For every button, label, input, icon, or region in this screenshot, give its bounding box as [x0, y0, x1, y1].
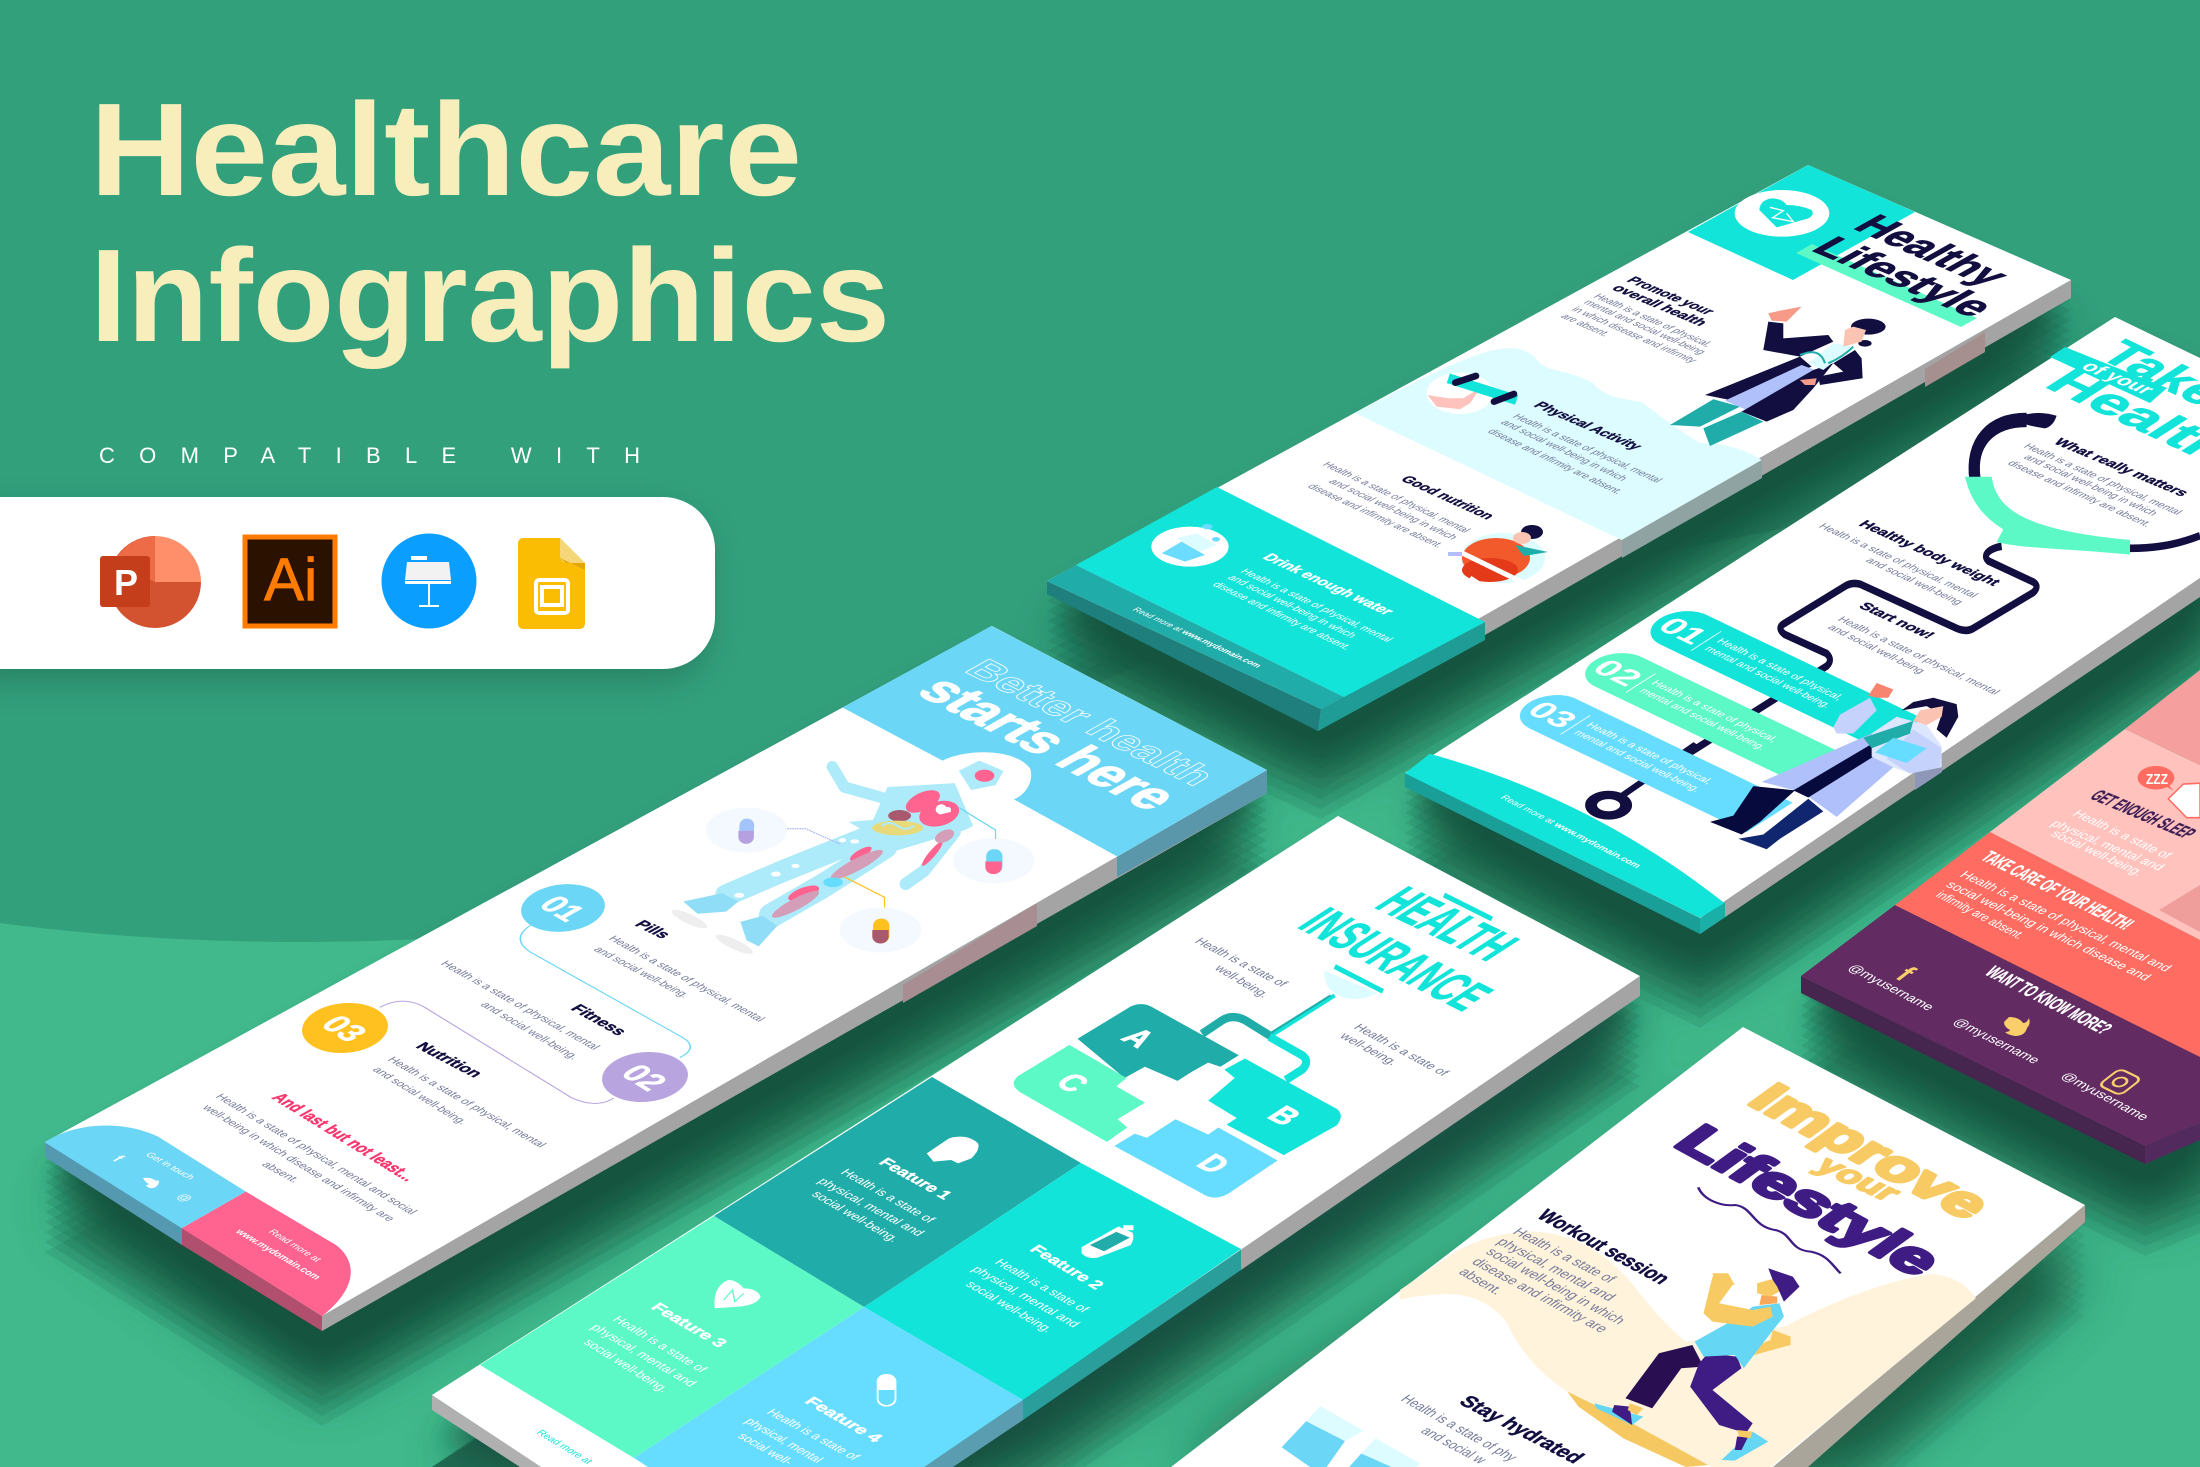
panel: Healthy Lifestyle card: [1047, 165, 2071, 731]
badge 01: [504, 874, 622, 942]
title: Improve your Lifestyle: Lifestyle: [1662, 1116, 1956, 1285]
panel: Health Insurance card: [432, 816, 1640, 1467]
panel: Take care of your health purple card: [1801, 670, 2200, 1164]
pill 03: 03: [1519, 696, 1585, 733]
badge 03: 03: [313, 1010, 375, 1047]
pill 01: 01: [1650, 613, 1716, 649]
text: good nutrition: Good nutrition: [1397, 474, 1498, 521]
text: physical activity: and social well-being in which: [1497, 419, 1630, 483]
title: Better health starts here: starts here: [904, 669, 1193, 818]
text: fitness: [437, 959, 630, 1061]
footer: [1405, 754, 1724, 918]
text: and last but not least: absent.: [258, 1160, 302, 1185]
text: drink enough water: [1209, 552, 1398, 652]
text: feature 3: [580, 1301, 731, 1395]
title: Improve your Lifestyle: Improve: [1737, 1075, 2005, 1227]
text: physical activity: Physical Activity: [1530, 400, 1647, 452]
text: and last but not least: well-being in which disease and infirmity are: [198, 1103, 397, 1223]
social: twitter: @myusername: [1949, 1015, 2044, 1066]
panel: software icons: [0, 497, 715, 682]
footer: Read more at: [265, 1228, 324, 1264]
text: feature 4: [734, 1395, 887, 1467]
illustration: stethoscope: [1687, 413, 2200, 755]
text: physical activity: Health is a state of physical, mental: [1509, 413, 1664, 484]
stethoscope ring: [1591, 744, 1696, 815]
feature cells: [480, 1077, 1241, 1467]
footer: f: [108, 1154, 127, 1164]
pill 01: Health is a state of physical,: [1714, 637, 1846, 702]
text: feature 1: social well-being.: [808, 1189, 903, 1244]
text: fitness: Fitness: [566, 1002, 630, 1038]
text: take care of your health: Health is a state of physical, mental and: [1956, 869, 2175, 974]
text: workout session: disease and infirmity are: [1468, 1255, 1613, 1335]
text: promote your overall health: mental and social well-being: [1580, 299, 1708, 356]
text: feature 2: Feature 2: [1025, 1243, 1107, 1292]
title: Health Insurance: INSURANCE: [1285, 900, 1505, 1019]
connector lines: [380, 925, 690, 1103]
icon: Illustrator: [245, 537, 335, 626]
text: drink enough water: disease and infirmity are absent.: [1209, 581, 1353, 652]
card side: [1047, 280, 2071, 731]
text: good nutrition: Health is a state of physical, mental: [1319, 461, 1472, 535]
icon: heart: [714, 1280, 761, 1308]
icon: PowerPoint: [100, 536, 201, 628]
social: facebook: f: [1889, 962, 1923, 986]
text: healthy body weight: [1815, 518, 2005, 607]
title: Take care of your Health: of your: [2076, 358, 2160, 398]
text: workout session: Health is a state of: [1509, 1225, 1620, 1285]
text: start now: and social well-being: [1824, 623, 1928, 676]
badge 02: 02: [613, 1059, 675, 1096]
illustration: human body with pills: [670, 761, 1034, 957]
title: Improve your Lifestyle: [1662, 1075, 2005, 1285]
puzzle letters: B: [1260, 1101, 1309, 1131]
pill 02: [1572, 646, 1858, 790]
badge 01: 01: [531, 891, 593, 926]
panel: Improve your Lifestyle card: [1171, 1027, 2085, 1467]
card face: [1047, 165, 2071, 709]
text: stay hydrated: and social w: [1417, 1424, 1492, 1466]
text: and last but not least: Health is a state of physical, mental and social: [212, 1092, 419, 1216]
title: Take care of your Health: [2033, 334, 2200, 471]
puzzle letters: D: [1189, 1149, 1238, 1179]
text: feature 3: physical, mental and: [587, 1322, 700, 1389]
text: feature 2: Health is a state of: [991, 1257, 1093, 1315]
icon: heart: [1735, 190, 1829, 237]
text: stay hydrated: Stay hydrated: [1454, 1392, 1589, 1467]
pill 03: mental and social well-being.: [1571, 728, 1704, 794]
title: Improve your Lifestyle: your: [1807, 1152, 1909, 1207]
text: good nutrition: [1304, 461, 1498, 550]
card face: [432, 816, 1640, 1467]
panel: Better health card: [45, 626, 1267, 1331]
pill 02: Health is a state of physical,: [1648, 679, 1781, 744]
card side: [432, 976, 1640, 1467]
text: nutrition: Health is a state of physical, mental: [384, 1055, 549, 1149]
icon: battery: [1082, 1225, 1133, 1258]
text: promote your overall health: are absent.: [1557, 313, 1612, 338]
header block: [842, 626, 1267, 857]
panel: Take care of your Health card: [1405, 317, 2200, 934]
footer: www.mydomain.com: [231, 1227, 323, 1282]
card side: [1405, 578, 2200, 934]
purple footer: [1801, 905, 2200, 1146]
text: start now: Health is a state of physical, mental: [1834, 615, 2002, 697]
icon: Keynote: [382, 534, 476, 628]
text: promote your overall health: Promote your: [1623, 275, 1719, 317]
text: good nutrition: and social well-being in which: [1325, 478, 1460, 542]
text: nutrition: and social well-being.: [369, 1065, 470, 1127]
text: pills: [590, 918, 767, 1024]
text: and last but not least: And last but not least...: [267, 1090, 422, 1184]
pill 03: Health is a state of physical,: [1583, 721, 1716, 786]
text: workout session: [1455, 1206, 1675, 1335]
cream hills: [1400, 1232, 1976, 1467]
icon: sleep bubble: [2138, 766, 2200, 818]
title: Health Insurance: [1285, 879, 1532, 1019]
text: pills: and social well-being.: [590, 945, 692, 1000]
text: feature 4: Health is a state of: [763, 1407, 864, 1463]
text: feature 1: physical, mental and: [814, 1176, 928, 1238]
text: feature 2: physical, mental and: [968, 1264, 1083, 1330]
icon: glass of water: [1151, 524, 1229, 567]
text: pills: Pills: [630, 918, 674, 941]
text: what really matters: [2004, 436, 2194, 529]
wavy line: [1698, 1187, 1841, 1273]
icon: Google Slides: [518, 538, 585, 629]
badge 03: [284, 993, 406, 1063]
text: drink enough water: and social well-being in which: [1224, 574, 1359, 640]
text: feature 3: social well-being.: [580, 1337, 673, 1395]
icon: head: [927, 1137, 979, 1163]
title: [90, 76, 890, 369]
text: right note: well-being.: [1335, 1030, 1402, 1067]
icon: Illustrator: Ai: [264, 546, 317, 613]
text: workout session: Workout session: [1532, 1206, 1675, 1288]
text: right note: Health is a state of: [1350, 1022, 1453, 1078]
text: fitness: Health is a state of physical, mental: [437, 959, 602, 1052]
puzzle letters: [1048, 1023, 1309, 1179]
text: feature 4: Feature 4: [800, 1395, 887, 1446]
illustration: doctor: [1670, 307, 1886, 446]
text: take care of your health: infirmity are absent.: [1933, 888, 2029, 941]
card side: [1801, 976, 2200, 1164]
title: Healthy Lifestyle: [1801, 210, 2020, 323]
text: stay hydrated: Health is a state of phy: [1397, 1392, 1521, 1464]
footer: [45, 1125, 351, 1316]
text: start now: [1824, 600, 2002, 697]
puzzle cross diagram: [1014, 967, 1383, 1198]
icon: capsule: [877, 1374, 896, 1407]
footer: Get in touch: [143, 1151, 197, 1181]
title: Healthy Lifestyle: Healthy: [1844, 210, 2020, 292]
card side: [45, 770, 1267, 1331]
illustration: apple and woman: [1448, 525, 1548, 586]
text: take care of your health: social well-being in which disease and: [1942, 878, 2155, 983]
text: nutrition: Nutrition: [411, 1040, 486, 1080]
text: drink enough water: Drink enough water: [1258, 552, 1398, 618]
text: promote your overall health: in which disease and infirmity: [1568, 306, 1700, 365]
text: what really matters: What really matters: [2050, 436, 2194, 499]
title: Infographics: [90, 222, 890, 369]
text: feature 2: [962, 1243, 1107, 1335]
text: healthy body weight: Health is a state of physical, mental: [1815, 522, 1981, 600]
card face: [45, 626, 1267, 1316]
card face: [1405, 317, 2200, 918]
text: want to know more: WANT TO KNOW MORE?: [1980, 963, 2116, 1038]
text: feature 4: physical, mental: [741, 1416, 827, 1465]
text: promote your overall health: [1557, 275, 1719, 365]
illustration: doctor with clipboard: [1710, 683, 1958, 849]
text: feature 3: Health is a state of: [609, 1314, 711, 1375]
badge 02: [584, 1042, 706, 1112]
title: Healthcare: [90, 76, 802, 223]
icon: arm with dumbbell: [1427, 373, 1517, 414]
text: get enough sleep: social well-being.: [2047, 828, 2147, 878]
pill 01: mental and social well-being.: [1701, 645, 1834, 710]
text: feature 1: [808, 1156, 956, 1244]
text: workout session: physical, mental and: [1493, 1235, 1620, 1303]
footer text: Read more at: [533, 1428, 595, 1466]
text: pills: Health is a state of physical, mental: [605, 934, 767, 1024]
pill 03: [1506, 688, 1793, 832]
text: get enough sleep: physical, mental and: [2047, 818, 2168, 873]
title band: [1796, 244, 1977, 327]
icon: sleep bubble: ZZZ: [2146, 771, 2168, 787]
wave band: [1355, 348, 1762, 540]
icon: PowerPoint: P: [114, 562, 138, 603]
pill 02: mental and social well-being.: [1636, 687, 1769, 752]
icons: water glasses: [1282, 1406, 1420, 1467]
title: Health Insurance: HEALTH: [1362, 879, 1532, 969]
text: left note: well-being.: [1210, 962, 1273, 1000]
text: stay hydrated: [1397, 1392, 1589, 1467]
footer text: Read more at www.mydomain.com: [1498, 794, 1644, 869]
text: start now: Start now!: [1855, 600, 1939, 641]
coral section: [1895, 832, 2200, 1057]
footer text: Read more at www.mydomain.com: [1130, 606, 1265, 669]
text: what really matters: disease and infirmity are absent.: [2004, 459, 2154, 529]
text: left note: Health is a state of: [1191, 936, 1292, 989]
footer: @: [173, 1191, 196, 1204]
text: workout session: social well-being in which: [1482, 1245, 1630, 1327]
puzzle letters: C: [1048, 1068, 1097, 1098]
text: healthy body weight: Healthy body weight: [1855, 518, 2005, 588]
text: feature 1: Feature 1: [874, 1156, 956, 1202]
puzzle letters: A: [1114, 1023, 1163, 1053]
pink section: [1990, 729, 2200, 940]
illustration: runner: [1594, 1268, 1800, 1461]
text: physical activity: disease and infirmity are absent.: [1484, 428, 1625, 496]
pill 02: 02: [1584, 654, 1651, 691]
pills 01 02 03: [1506, 604, 1923, 832]
text: get enough sleep: [2047, 787, 2200, 878]
text: feature 3: Feature 3: [646, 1301, 731, 1350]
title: Better health starts here: Better health: [955, 654, 1226, 791]
text: what really matters: Health is a state of physical, mental: [2020, 442, 2185, 517]
social: facebook: @myusername: [1845, 961, 1938, 1013]
social: instagram: @myusername: [2058, 1069, 2153, 1123]
footer: [1047, 487, 1485, 709]
text: good nutrition: disease and infirmity are absent.: [1304, 483, 1446, 550]
header block: [1688, 165, 1915, 280]
text: get enough sleep: Health is a state of: [2069, 808, 2175, 861]
title: Healthy Lifestyle: Lifestyle: [1801, 232, 2005, 323]
text: healthy body weight: and social well-being: [1862, 556, 1966, 607]
text: nutrition: [369, 1040, 549, 1149]
text: physical activity: [1484, 400, 1664, 496]
card face: [1171, 1027, 2085, 1467]
text: promote your overall health: overall health: [1608, 283, 1711, 328]
text: promote your overall health: Health is a state of physical,: [1590, 293, 1714, 349]
text: workout session: absent.: [1455, 1265, 1507, 1297]
text: fitness: and social well-being.: [477, 1000, 581, 1061]
text: feature 2: social well-being.: [962, 1279, 1057, 1335]
text: what really matters: and social well-being in which: [2020, 453, 2161, 518]
text: drink enough water: Health is a state of physical, mental: [1237, 568, 1395, 644]
text: feature 1: Health is a state of: [837, 1167, 939, 1225]
subtitle: compatible with: COMPATIBLE WITH: [99, 443, 640, 468]
pill 01: [1637, 604, 1923, 748]
text: feature 4: social well-: [734, 1431, 797, 1467]
card side: [1773, 1205, 2085, 1467]
